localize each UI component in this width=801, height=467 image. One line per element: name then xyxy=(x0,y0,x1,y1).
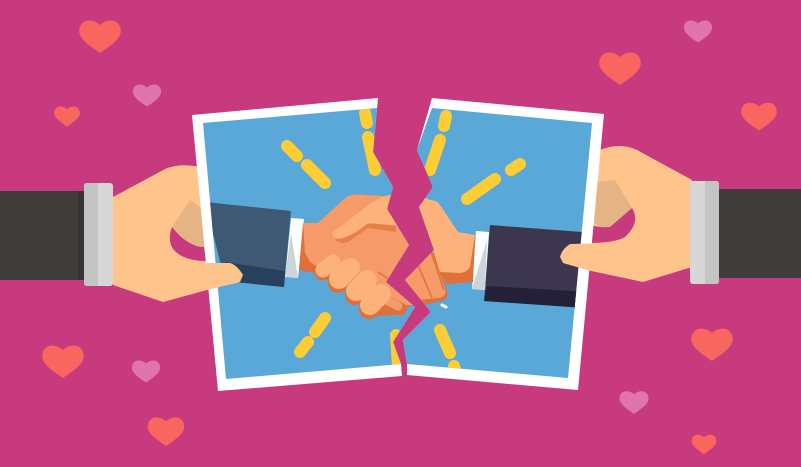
left photo content xyxy=(205,113,420,366)
right photo content xyxy=(405,110,582,369)
photo left half xyxy=(192,98,420,391)
right hand back xyxy=(570,146,692,282)
left arm sleeve xyxy=(0,191,85,280)
left cuff xyxy=(84,183,113,286)
left hand back xyxy=(113,165,225,302)
right thumb xyxy=(560,243,620,277)
right cuff xyxy=(690,181,719,284)
right arm sleeve xyxy=(719,189,801,278)
left thumb xyxy=(190,263,243,294)
photo right half xyxy=(400,98,604,390)
